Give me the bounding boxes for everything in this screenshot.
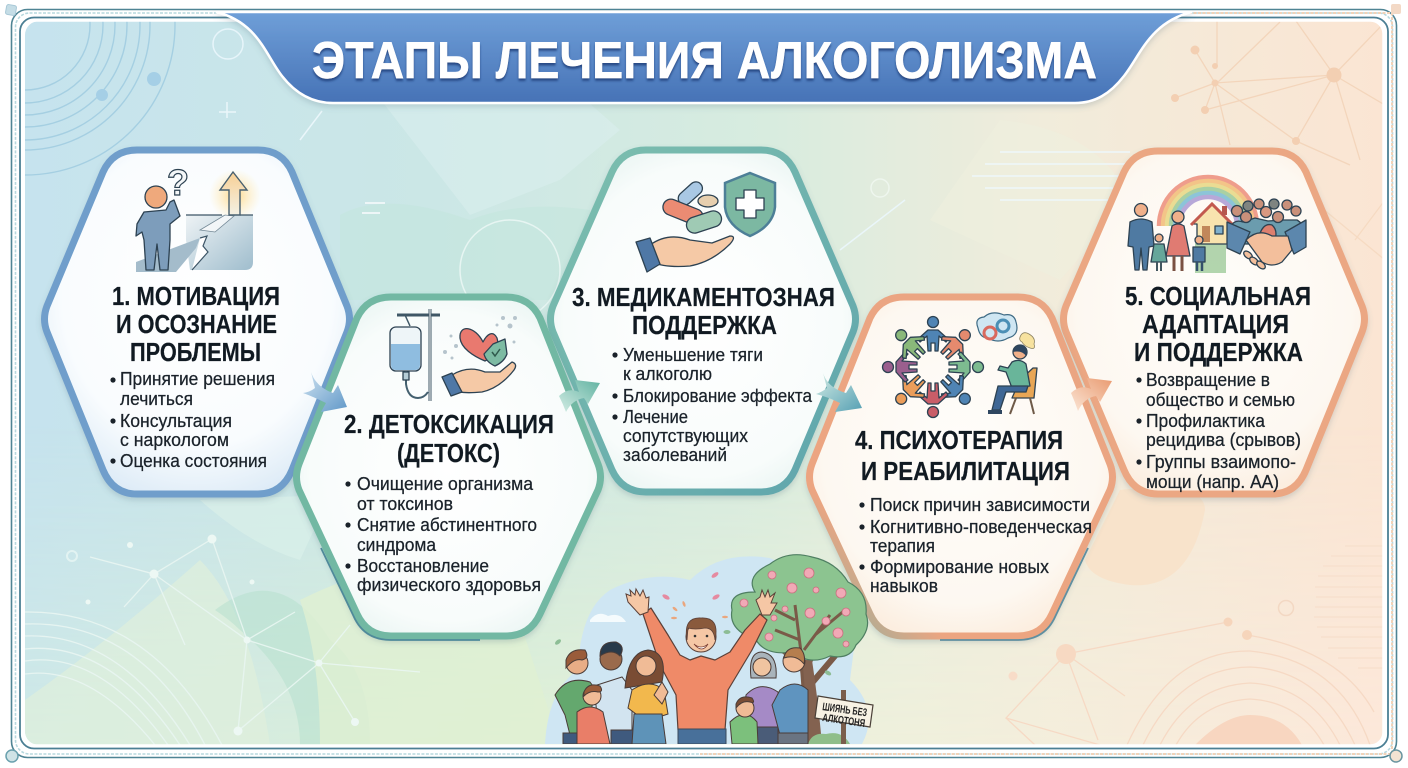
sign [815,690,873,744]
title banner [216,12,1192,103]
heading [344,409,554,468]
icon: person at a crack with an up arrow: ? [167,162,189,203]
arrow: step 3 to 4 [816,373,862,412]
bullet list: от токсинов [357,494,453,514]
icon: pills, shield and hand [636,173,775,272]
heading: 2. ДЕТОКСИКАЦИЯ [344,409,554,439]
arrow: step 2 to 3 [559,380,600,412]
bullet list: Блокирование эффекта [623,386,813,406]
bullet list: Очищение организма [357,474,534,494]
bullet list: синдрома [357,535,437,555]
bullet list: Когнитивно-поведенческая [870,517,1092,537]
bullet list: Принятие решения [120,369,275,389]
confetti [554,571,832,676]
heading: 3. МЕДИКАМЕНТОЗНАЯ [572,282,835,312]
bullet list: Формирование новых [870,557,1049,577]
illustration: happy family under a tree [545,555,873,744]
bullet list [612,345,813,465]
panel: step 1 [44,150,350,494]
heading: 5. СОЦИАЛЬНАЯ [1125,281,1311,311]
sign: ШИЯНЬ БЕЗ [822,701,868,719]
heading: АДАПТАЦИЯ [1142,309,1289,339]
bullet list [1136,370,1301,492]
panel: step 3 [550,150,856,492]
bullet list: заболеваний [623,445,727,465]
panel: step 4 [810,297,1112,640]
title text: ЭТАПЫ ЛЕЧЕНИЯ АЛКОГОЛИЗМА [312,32,1097,90]
bullet list: Лечение [623,407,688,427]
bullet list: Возвращение в [1146,370,1270,390]
bullet list [110,369,275,471]
heading: ПРОБЛЕМЫ [130,337,261,367]
panel: step 5 [1064,151,1364,494]
icon: family, home and handshake [1128,177,1306,273]
heading: ПОДДЕРЖКА [632,310,777,340]
sign: АЛКОТОНЯ [822,712,866,730]
main figure [626,589,777,744]
bullet list: мощи (напр. АА) [1146,472,1279,492]
bullet list: Профилактика [1146,411,1266,431]
bullet list: с наркологом [120,430,229,450]
arrow: step 1 to 2 [303,372,347,412]
icon: support circle and therapy [882,313,1037,418]
arrow: step 4 to 5 [1071,378,1112,411]
bullet list: физического здоровья [357,575,541,595]
left group [555,642,668,744]
heading: (ДЕТОКС) [397,438,500,468]
icon: person at a crack with an up arrow [136,162,261,272]
heading: И ПОДДЕРЖКА [1134,337,1303,367]
heading: 1. МОТИВАЦИЯ [112,281,280,311]
heading [572,282,835,340]
bullet list: Консультация [120,411,232,431]
bullet list: к алкоголю [623,364,712,384]
bullet list: Оценка состояния [120,451,267,471]
bullet list: сопутствующих [623,426,748,446]
heading [855,425,1070,486]
bullet list [859,495,1092,596]
heading [1125,281,1311,367]
bullet list: Поиск причин зависимости [870,495,1090,515]
tree [731,555,868,744]
bullet list [345,474,541,595]
bullet list: общество и семью [1146,390,1295,410]
bullet list: Уменьшение тяги [623,345,763,365]
heading: И РЕАБИЛИТАЦИЯ [861,456,1070,486]
bullet list: Снятие абстинентного [357,515,537,535]
icon: IV drip, heart and hand [390,309,517,401]
panel: step 2 [296,297,600,640]
bullet list: лечиться [120,389,193,409]
heading: 4. ПСИХОТЕРАПИЯ [855,425,1063,455]
bullet list: Группы взаимопо- [1146,452,1296,472]
heading: И ОСОЗНАНИЕ [116,309,277,339]
bullet list: рецидива (срывов) [1146,430,1301,450]
bullet list: Восстановление [357,556,489,576]
heading [112,281,280,367]
bullet list: навыков [870,576,938,596]
right group [730,648,808,744]
bullet list: терапия [870,536,935,556]
